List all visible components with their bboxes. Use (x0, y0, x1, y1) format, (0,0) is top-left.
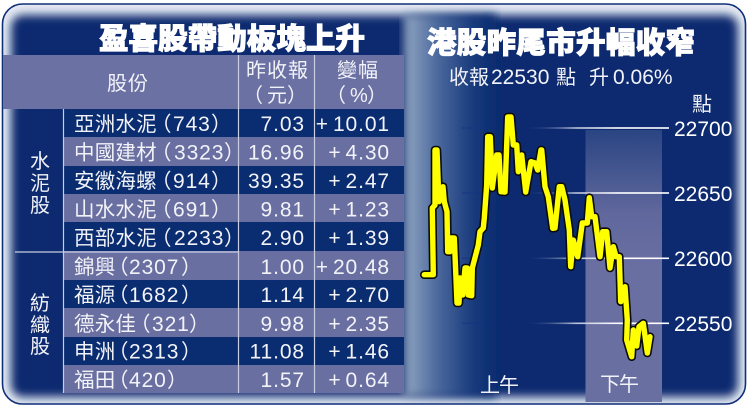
category label: cement: 股 (30, 195, 50, 217)
subtitle: closing level: 點 (556, 66, 576, 89)
y axis labels: 22700 (674, 118, 732, 141)
y axis unit: 點 (692, 93, 712, 116)
row: 福源 (74, 284, 390, 307)
row: 山水水泥: 9.81 (261, 198, 305, 222)
row: 錦興: ） (181, 256, 202, 279)
table header row: ） (367, 84, 387, 107)
category label: textile (30, 292, 50, 358)
row: 西部水泥: 西部水泥 (74, 227, 157, 250)
category label: textile: 織 (30, 314, 50, 337)
row: 福田: ） (167, 369, 188, 392)
row: 安徽海螺: 39.35 (248, 170, 305, 193)
row: 亞洲水泥: 7.03 (261, 113, 305, 136)
table header row (3, 55, 404, 109)
y axis labels: 22650 (674, 183, 732, 206)
table header row: （ (243, 84, 263, 107)
row: 福田: 420 (129, 369, 167, 392)
row: 山水水泥: 691 (173, 198, 211, 222)
table row stripes (15, 55, 404, 393)
x axis label: afternoon: 下午 (600, 373, 638, 396)
row: 安徽海螺: 安徽海螺 (74, 170, 157, 193)
row: 安徽海螺: 914 (173, 170, 211, 193)
row: 福田 (74, 369, 390, 392)
row: 亞洲水泥: 743 (173, 113, 211, 136)
row: 山水水泥: 山水水泥 (74, 198, 157, 222)
row: 德永佳: ） (189, 313, 210, 336)
row: 中國建材: +4.30 (328, 142, 390, 164)
row: 山水水泥 (74, 198, 390, 222)
row: 福田: 1.57 (261, 369, 305, 392)
row: 錦興: 1.00 (261, 256, 305, 279)
row: 安徽海螺 (74, 170, 390, 193)
row: 山水水泥: ） (211, 198, 232, 222)
category label: cement (30, 150, 50, 217)
row: 德永佳 (74, 313, 390, 336)
y axis labels (674, 118, 732, 336)
row: 申洲: 11.08 (250, 340, 305, 364)
panel: stock table (3, 55, 404, 393)
table header row: % (350, 85, 368, 107)
row: 中國建材: （ (151, 142, 172, 164)
subtitle: closing level: 0.06% (613, 66, 673, 89)
row: 申洲 (74, 340, 390, 364)
row: 福源: +2.70 (328, 284, 390, 307)
row: 德永佳: （ (130, 313, 151, 336)
category label: cement: 泥 (30, 172, 50, 195)
subtitle: closing level: 22530 (491, 66, 549, 89)
row: 西部水泥 (74, 227, 390, 250)
row: 德永佳: 德永佳 (74, 313, 136, 336)
row: 申洲: ） (181, 340, 202, 364)
table header row: 股份 (107, 72, 148, 95)
subtitle: closing level: 升 (589, 66, 609, 89)
row: 福田: （ (108, 369, 129, 392)
subtitle: closing level: 收報 (449, 66, 489, 89)
y axis labels: 22550 (674, 313, 732, 336)
row: 申洲: （ (108, 340, 129, 364)
row: 錦興: 2307 (129, 256, 179, 279)
heading: right panel title: 港股昨尾市升幅收窄 (427, 26, 695, 60)
row: 亞洲水泥 (74, 113, 390, 136)
row: 錦興 (74, 256, 390, 279)
row: 福田: 福田 (74, 369, 115, 392)
table header row: 變幅 (337, 59, 378, 82)
row: 山水水泥: （ (151, 198, 172, 222)
row: 福源: 福源 (74, 284, 115, 307)
row: 申洲: +1.46 (328, 340, 390, 364)
horizontal grid lines (462, 127, 669, 324)
row: 錦興: +20.48 (316, 256, 390, 279)
table header row: 昨收報 (246, 59, 308, 82)
row: 錦興: （ (108, 256, 129, 279)
row: 西部水泥: +1.39 (328, 227, 390, 250)
row: 申洲: 2313 (129, 340, 179, 364)
row: 錦興: 錦興 (74, 256, 115, 279)
afternoon band (586, 130, 662, 402)
row: 中國建材: 16.96 (248, 142, 305, 164)
row: 福田: +0.64 (328, 369, 390, 392)
row: 中國建材: 3323 (174, 142, 224, 164)
row: 福源: 1.14 (261, 284, 305, 307)
row: 中國建材: ） (224, 142, 245, 164)
row: 山水水泥: +1.23 (328, 198, 390, 222)
row: 福源: ） (181, 284, 202, 307)
table header row: 元 (267, 85, 287, 107)
row: 福源: （ (108, 284, 129, 307)
category label: cement: 水 (30, 150, 50, 173)
heading: left panel title: 盈喜股帶動板塊上升 (99, 23, 365, 56)
row: 中國建材 (74, 142, 390, 164)
price line (424, 117, 650, 357)
row: 安徽海螺: ） (211, 170, 232, 193)
row: 西部水泥: 2233 (174, 227, 224, 250)
row: 西部水泥: （ (151, 227, 172, 250)
row: 西部水泥: ） (224, 227, 245, 250)
row: 亞洲水泥: +10.01 (316, 113, 390, 136)
row: 中國建材: 中國建材 (74, 142, 157, 164)
row: 申洲: 申洲 (74, 340, 115, 364)
row: 亞洲水泥: ） (211, 113, 232, 136)
y axis labels: 22600 (674, 248, 732, 271)
row: 福源: 1682 (129, 284, 179, 307)
row: 德永佳: 9.98 (261, 313, 305, 336)
x axis label: morning: 上午 (480, 374, 518, 397)
row: 安徽海螺: +2.47 (328, 170, 390, 193)
row: 西部水泥: 2.90 (261, 227, 305, 250)
category label: textile: 股 (30, 336, 50, 358)
table header row: ） (287, 84, 307, 107)
row: 德永佳: 321 (152, 313, 190, 336)
row: 安徽海螺: （ (151, 170, 172, 193)
table header row: （ (326, 84, 346, 107)
category label: textile: 紡 (30, 292, 50, 315)
chart: Hang Seng intraday line (424, 93, 732, 402)
row: 亞洲水泥: （ (151, 113, 172, 136)
row: 德永佳: +2.35 (328, 313, 390, 336)
row: 亞洲水泥: 亞洲水泥 (74, 113, 157, 136)
